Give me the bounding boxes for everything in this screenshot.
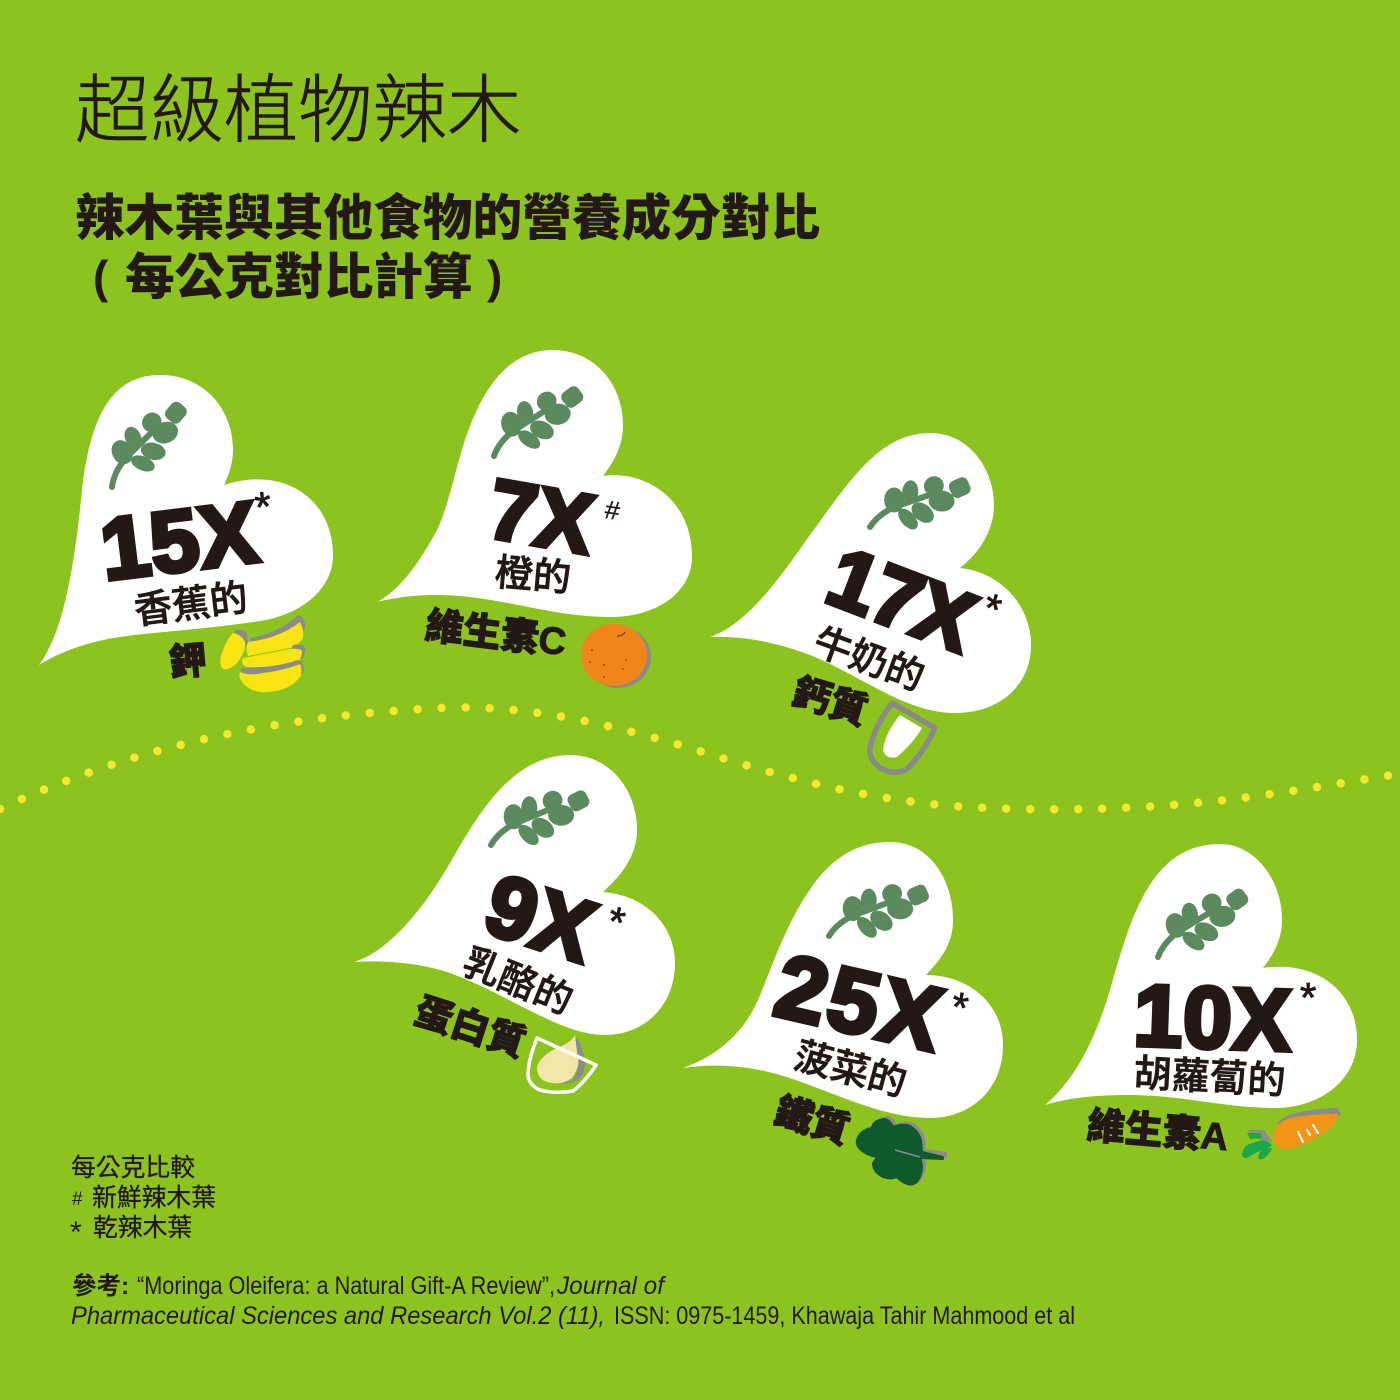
multiplier: 9X [474,856,607,982]
footnote mark: * [603,897,629,946]
panel: 25X spinach iron [683,842,1003,1185]
subtitle: 辣木葉與其他食物的營養成分對比 [75,190,820,246]
heart shape [354,755,675,1035]
icon: carrot [1242,1108,1341,1159]
legend note: # [72,1189,83,1210]
footnote mark: * [1300,974,1316,1021]
icon: moringa sprig [816,863,937,957]
food label: 乳酪的 [457,941,578,1023]
nutrient label: 維生素C [423,605,568,664]
nutrient label: 鈣質 [787,671,872,734]
legend note: 新鮮辣木葉 [92,1184,216,1212]
icon: glass of milk [870,703,935,772]
heart shape [1045,844,1357,1108]
reference citation: 參考: [72,1272,129,1300]
footnote mark: * [947,983,972,1032]
nutrient label: 鐵質 [769,1090,854,1153]
food label: 橙的 [493,552,573,601]
footnote mark: # [603,494,622,526]
food label: 胡蘿蔔的 [1133,1053,1287,1103]
heart shape [710,433,1031,713]
heart shape [683,842,1003,1118]
legend note: * [70,1216,82,1249]
title: 超級植物辣木 [75,69,521,152]
icon: yogurt bowl [528,1035,596,1092]
reference citation: “Moringa Oleifera: a Natural Gift-A Review”, [137,1272,555,1300]
multiplier: 10X [1132,967,1293,1069]
subtitle: ) [487,251,502,303]
nutrient label: 蛋白質 [409,991,531,1066]
heart shape [377,350,692,617]
multiplier: 17X [816,529,988,670]
heart shape [39,375,333,665]
icon: orange [581,624,651,688]
subtitle: 每公克對比計算 [125,249,473,305]
reference citation: Journal of [556,1272,667,1300]
panel: 7X orange vitamin C [377,350,692,688]
nutrient label: 鉀 [167,640,209,685]
panel: 17X milk calcium [710,433,1031,772]
legend note: 每公克比較 [71,1154,195,1182]
food label: 菠菜的 [790,1035,911,1105]
dotted wave divider [0,707,1392,809]
legend note: 乾辣木葉 [93,1214,192,1242]
icon: moringa sprig [858,456,978,548]
multiplier: 7X [482,461,601,572]
multiplier: 25X [767,936,954,1072]
legend note [70,1154,216,1249]
reference citation: Pharmaceutical Sciences and Research Vol.2 (11), [71,1302,605,1330]
reference citation [71,1272,1075,1330]
multiplier: 15X [95,483,264,599]
icon: bananas [220,615,305,692]
subtitle: ( [93,251,109,303]
icon: spinach leaf [857,1117,946,1185]
panel: 10X carrot vitamin A [1045,844,1357,1159]
food label: 牛奶的 [808,621,929,699]
icon: moringa sprig [89,385,200,502]
reference citation: ISSN: 0975-1459, Khawaja Tahir Mahmood et al [614,1302,1075,1330]
icon: moringa sprig [476,367,594,474]
footnote mark: * [252,482,274,531]
food label: 香蕉的 [132,577,250,633]
subtitle [75,190,820,305]
footnote mark: * [977,584,1007,633]
nutrient label: 維生素A [1085,1105,1230,1159]
icon: moringa sprig [1140,869,1259,976]
panel: 9X cheese protein [354,755,675,1092]
panel: 15X banana potassium [39,375,333,692]
icon: moringa sprig [477,769,598,866]
